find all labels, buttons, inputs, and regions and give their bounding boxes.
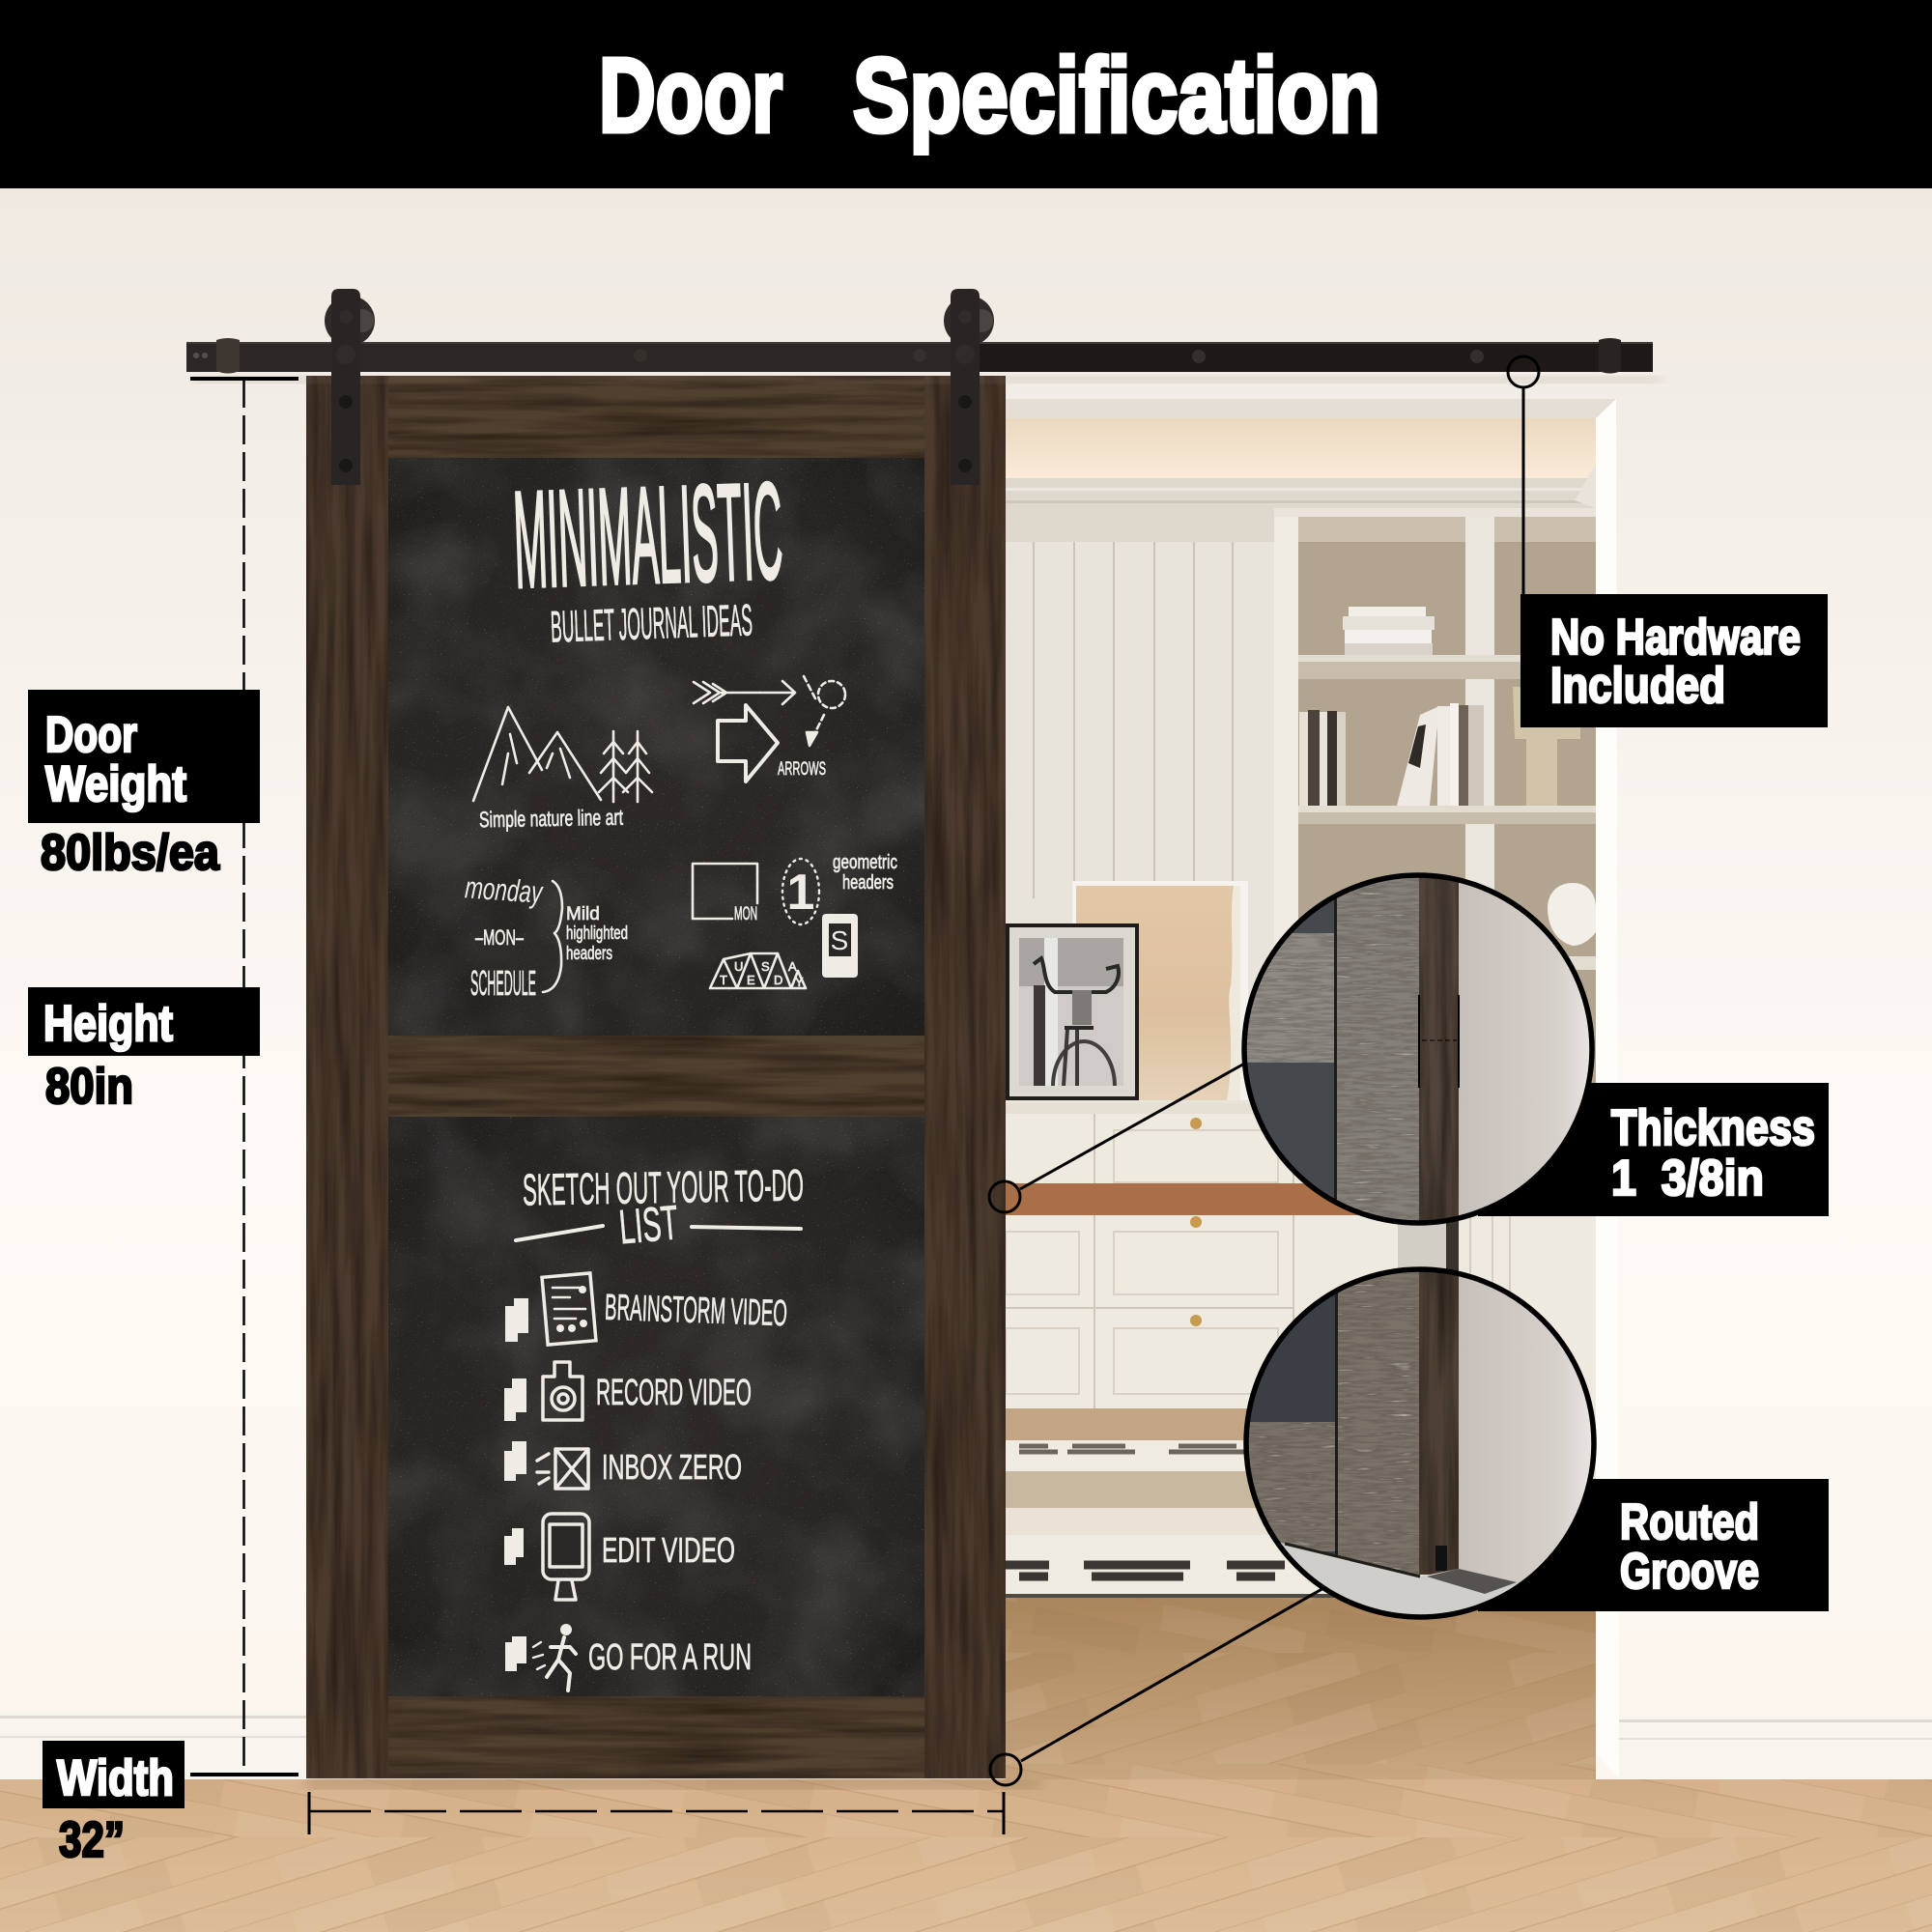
- highlighted headers: headers: [566, 944, 612, 964]
- brace: [543, 881, 562, 992]
- door: [306, 376, 1006, 1778]
- callout: thickness: Thickness: [1611, 1100, 1815, 1156]
- row 2: record: [504, 1362, 752, 1421]
- geometric headers: geometric: [833, 852, 897, 873]
- checkbox: [505, 1636, 526, 1671]
- callout: routed groove: [990, 1265, 1829, 1785]
- tuesday bunting: Y: [795, 975, 804, 989]
- tuesday bunting: D: [774, 973, 782, 987]
- lower cabinets: [1006, 1103, 1596, 1408]
- door head soffit: [1006, 399, 1616, 418]
- label: EDIT VIDEO: [602, 1530, 735, 1570]
- left stile: [306, 376, 388, 1778]
- dimension: height: [190, 379, 298, 1775]
- callout: door weight: Door: [45, 707, 137, 763]
- chalk art: bottom panel: [504, 1159, 804, 1690]
- row 3: inbox: [504, 1441, 742, 1489]
- brainstorm board icon: [542, 1273, 596, 1345]
- checkbox: [504, 1378, 526, 1421]
- right door jamb: [1596, 399, 1619, 1778]
- middle rail: [388, 1036, 924, 1117]
- row 1: brainstorm: [505, 1273, 788, 1345]
- highlighted headers: [566, 904, 628, 964]
- label: RECORD VIDEO: [596, 1373, 752, 1413]
- callout: door weight: [28, 690, 260, 881]
- tuesday bunting: T: [720, 973, 727, 987]
- row 5: run: [505, 1626, 752, 1690]
- chalk art: bottom panel: BRAINSTORM VIDEO: [604, 1288, 788, 1334]
- circled one: [782, 859, 819, 924]
- right stile: [924, 376, 1006, 1778]
- arrows caption: ARROWS: [778, 759, 826, 780]
- crown moulding: [1006, 464, 1596, 508]
- right hanger: [944, 289, 994, 485]
- callout: height: 80in: [45, 1059, 133, 1115]
- header band: [0, 0, 1932, 188]
- callout: width: [43, 1741, 185, 1868]
- row 4: edit: [504, 1514, 735, 1600]
- mon label: –MON–: [475, 925, 525, 950]
- beige art print: [1072, 881, 1248, 1100]
- doorway and room beyond: [1006, 399, 1619, 1779]
- highlighted headers: highlighted: [566, 923, 628, 944]
- book stack: [1343, 607, 1435, 655]
- zoom circle: door edge: [1239, 870, 1599, 1228]
- chalk art: top panel: SCHEDULE: [470, 963, 536, 1003]
- title: [599, 37, 1380, 155]
- runner icon: [533, 1626, 576, 1690]
- tuesday bunting: U: [734, 959, 743, 974]
- zoom circle: door bottom: [1248, 1271, 1588, 1615]
- highlighted headers: Mild: [566, 904, 600, 924]
- tuesday bunting: A: [788, 959, 797, 974]
- checkbox: [504, 1441, 526, 1481]
- bookcase: [1274, 517, 1596, 1116]
- top chalkboard panel: [388, 458, 924, 1036]
- room parquet: [1006, 1598, 1596, 1779]
- geometric headers: [833, 852, 897, 894]
- checkbox: [504, 1528, 524, 1565]
- tuesday bunting: [710, 953, 806, 989]
- callout: no hardware included: No Hardware: [1550, 610, 1801, 666]
- title: Door: [599, 37, 782, 155]
- camera icon: [543, 1362, 582, 1420]
- rectangle header: [693, 864, 757, 919]
- envelope icon: [537, 1449, 588, 1489]
- callout: width: 32”: [59, 1812, 125, 1868]
- callout: door weight: 80lbs/ea: [41, 825, 220, 881]
- callout: no hardware included: [1508, 356, 1828, 727]
- callout: width: Width: [57, 1750, 174, 1806]
- bottom chalkboard panel: [388, 1117, 924, 1696]
- label: INBOX ZERO: [602, 1447, 742, 1487]
- nature caption: Simple nature line art: [479, 805, 624, 832]
- list heading: LIST: [617, 1195, 680, 1254]
- monday script: monday: [464, 869, 545, 910]
- s badge: [822, 914, 858, 978]
- room floor and rug: [1006, 1408, 1334, 1599]
- dimension: width: [309, 1792, 1004, 1834]
- monitor icon: [543, 1514, 589, 1600]
- geometric headers: headers: [842, 872, 894, 894]
- circled one: 1: [787, 865, 814, 921]
- vase: [1548, 883, 1596, 946]
- barn door track: [186, 338, 1662, 383]
- callout: thickness: 1 3/8in: [1611, 1151, 1764, 1207]
- wood counter: [1006, 1183, 1402, 1215]
- tuesday bunting: S: [761, 959, 770, 974]
- mon header: MON: [734, 904, 757, 924]
- callout: height: [28, 987, 260, 1115]
- upright books: [1299, 703, 1484, 806]
- left stop: [216, 338, 240, 373]
- mountains and trees: [473, 707, 652, 802]
- sculpture: [1513, 687, 1580, 806]
- bottom rail: [388, 1696, 924, 1778]
- chalk art: top panel: BULLET JOURNAL IDEAS: [550, 594, 753, 652]
- callout: routed groove: Groove: [1620, 1544, 1759, 1600]
- lit ceiling: [1006, 418, 1596, 478]
- left hanger: [325, 289, 375, 485]
- top rail: [388, 376, 924, 458]
- arrows: [694, 676, 845, 781]
- text: MINIMALISTIC: [511, 454, 785, 617]
- checkbox: [505, 1298, 528, 1342]
- right stop: [1599, 338, 1621, 373]
- callout: routed groove: Routed: [1620, 1494, 1759, 1550]
- text: SKETCH OUT YOUR TO-DO: [523, 1159, 804, 1215]
- label: GO FOR A RUN: [588, 1637, 752, 1678]
- s badge: S: [831, 925, 848, 955]
- callout: door weight: Weight: [45, 756, 186, 812]
- track bolts: [634, 349, 1484, 363]
- framed bicycle photo: [1006, 923, 1139, 1100]
- callout: no hardware included: Included: [1550, 658, 1725, 714]
- callout: thickness: [989, 870, 1829, 1228]
- tuesday bunting: E: [747, 973, 755, 987]
- title: Specification: [853, 37, 1380, 155]
- list underlines: [516, 1226, 801, 1240]
- callout: height: Height: [43, 996, 173, 1052]
- wall panelling: [1006, 508, 1274, 1126]
- chalk art: top panel: [464, 454, 897, 1003]
- floor: [0, 1778, 1932, 1932]
- baseboards: [0, 1712, 1932, 1779]
